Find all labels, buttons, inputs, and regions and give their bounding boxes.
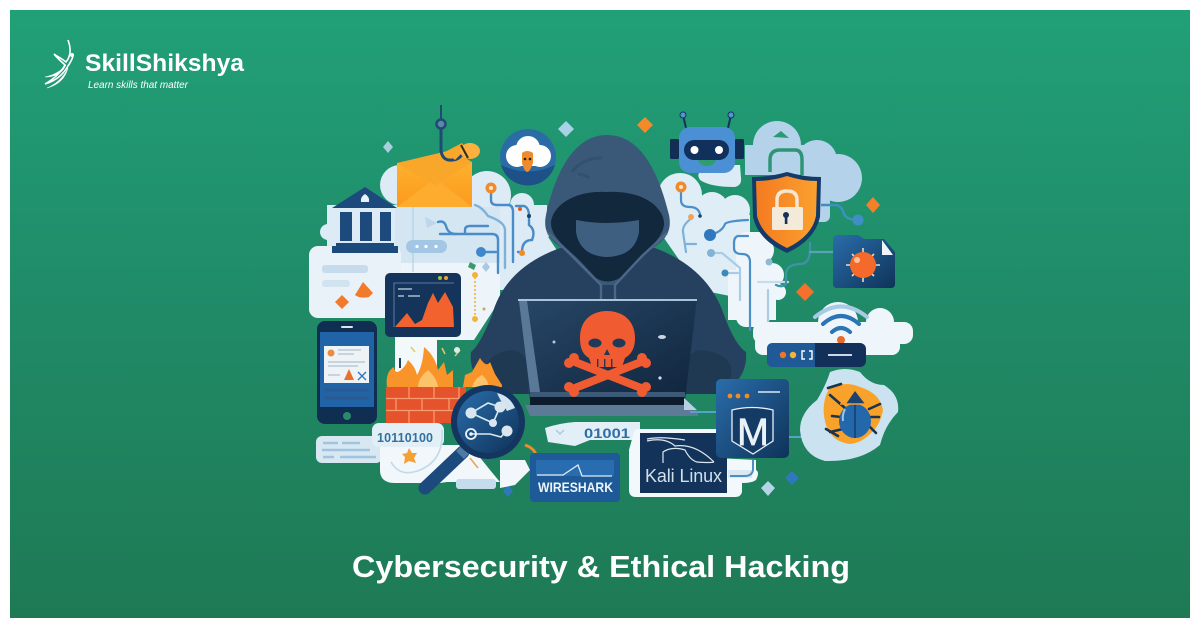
icon: shield with padlock <box>752 172 821 253</box>
dotted status line <box>468 262 486 322</box>
icon: analytics window <box>385 273 461 337</box>
chat bubble pill <box>406 207 447 272</box>
icon: hacker cloud badge <box>500 129 556 186</box>
circuit lines <box>681 190 833 333</box>
icon: leaping figure <box>45 40 74 88</box>
hacker figure <box>471 135 746 394</box>
torso <box>471 248 746 394</box>
title: Cybersecurity & Ethical Hacking <box>352 549 850 584</box>
hood <box>545 135 670 285</box>
laptop <box>518 299 698 416</box>
left network cloud <box>320 160 560 340</box>
letter M: M <box>737 412 769 454</box>
lure <box>445 143 480 160</box>
sparkle diamonds <box>383 117 880 497</box>
binary text: 10110100 <box>377 431 433 445</box>
connector lines <box>690 412 811 437</box>
right network cloud <box>655 173 833 333</box>
icon: metasploit window <box>716 379 789 458</box>
padlock <box>772 191 803 230</box>
icon: robot <box>670 112 744 173</box>
icon: wireshark badge <box>530 453 620 502</box>
icon: phishing hook and envelope <box>397 105 480 207</box>
binary data card and panels <box>316 423 500 489</box>
icon: kali linux badge <box>629 429 758 497</box>
fishing hook <box>436 105 463 160</box>
kali linux label: Kali Linux <box>645 466 722 486</box>
brick wall <box>386 387 466 423</box>
icon: wifi router cloud <box>753 302 913 367</box>
icon: folder with virus <box>833 235 895 288</box>
icon: phone alert <box>317 321 377 424</box>
hood edge and drawstrings <box>548 233 667 299</box>
envelope <box>397 150 472 207</box>
logo <box>45 40 245 91</box>
icon: firewall with flames <box>386 338 502 423</box>
shield connector node <box>821 205 864 226</box>
icon: magnifying glass <box>425 385 525 488</box>
circuit lines <box>438 192 533 273</box>
icon: beetle in cloud <box>800 369 898 461</box>
binary digits: 01001 <box>584 425 630 441</box>
left info panel <box>309 246 401 318</box>
icon: wireshark badge: WIRESHARK <box>538 479 613 495</box>
brand name: SkillShikshya <box>85 50 245 77</box>
icon: bank <box>332 187 398 253</box>
skull and crossbones <box>564 311 651 397</box>
binary cloud <box>500 422 640 488</box>
right upper cloud behind shield <box>698 121 862 222</box>
router <box>767 343 866 367</box>
tagline: Learn skills that matter <box>88 79 188 91</box>
